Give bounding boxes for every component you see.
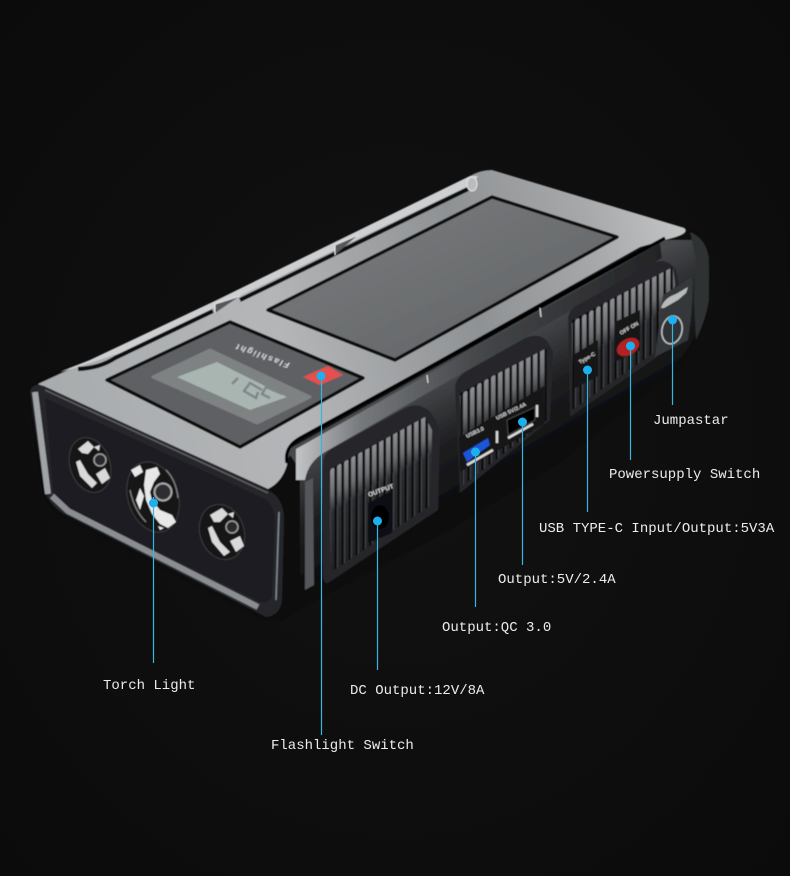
dc port plate xyxy=(368,490,393,543)
callout: qc output xyxy=(442,448,551,636)
rear groove xyxy=(78,188,470,369)
callout: torch light xyxy=(103,497,195,694)
jump starter device xyxy=(30,170,710,620)
front trim xyxy=(30,385,284,617)
off on label: OFF ON xyxy=(619,321,640,337)
callout: jumpstart: Jumpastar xyxy=(653,413,729,429)
red switch xyxy=(614,334,642,360)
panel: front face xyxy=(30,385,284,617)
dc port xyxy=(371,505,389,529)
back rim highlight xyxy=(60,176,478,372)
callout: dc output xyxy=(350,516,485,699)
callout: power supply switch: Powersupply Switch xyxy=(609,467,760,483)
blue qc port xyxy=(463,438,490,462)
flashlight button xyxy=(303,366,343,385)
usb port xyxy=(507,407,535,435)
left trim highlight xyxy=(35,392,48,494)
bottom trim highlight xyxy=(52,496,258,607)
vertical gray band xyxy=(305,478,314,590)
power switch plate xyxy=(615,310,640,362)
display bezel xyxy=(107,322,363,447)
lcd outer xyxy=(153,350,310,423)
lcd digits xyxy=(232,378,282,398)
type-c label: Type-C xyxy=(578,351,597,366)
callout: usb type-c: USB TYPE-C Input/Output:5V3A xyxy=(539,521,775,537)
panel: display area xyxy=(107,322,363,447)
output label: OUTPUT xyxy=(367,483,395,499)
qc port trim xyxy=(467,431,497,465)
side wall xyxy=(285,240,707,612)
callout: torch light: Torch Light xyxy=(103,678,195,694)
right lens xyxy=(192,499,252,565)
lcd screen xyxy=(177,362,287,410)
top silver surface xyxy=(38,170,686,489)
callout: qc output: Output:QC 3.0 xyxy=(442,620,551,636)
usb 5v label: USB 5V/2.4A xyxy=(495,402,528,422)
main groove xyxy=(287,238,665,463)
groove notches xyxy=(215,235,358,313)
strip ticks xyxy=(427,308,541,383)
panel: usb grill xyxy=(455,336,553,493)
flashlight label: Flashlight xyxy=(234,342,291,371)
callout: usb type-c xyxy=(539,366,775,537)
panel: power grill xyxy=(568,261,692,417)
usb 3 label: USB3.0 xyxy=(465,426,485,440)
jump start plate xyxy=(655,277,692,357)
top trim line xyxy=(45,390,268,493)
callout: flashlight switch xyxy=(271,372,414,754)
dark corner pillar xyxy=(272,455,300,616)
callout: dc output: DC Output:12V/8A xyxy=(350,683,485,699)
right trim line xyxy=(276,512,279,600)
usb port trim xyxy=(508,405,537,438)
callout: power supply switch xyxy=(609,342,760,483)
left lens xyxy=(62,432,118,498)
silver strip xyxy=(296,243,662,480)
device body xyxy=(30,170,710,620)
callout: jumpstart xyxy=(653,316,729,429)
front face xyxy=(45,398,275,602)
callout: usb output xyxy=(498,418,616,588)
center lens xyxy=(118,455,188,539)
callout: flashlight switch: Flashlight Switch xyxy=(271,738,414,754)
end cap xyxy=(690,232,709,340)
type-c plate xyxy=(575,340,598,388)
car icon xyxy=(661,287,688,308)
panel: rubber mat xyxy=(268,197,617,360)
start button xyxy=(659,314,685,346)
usb plate xyxy=(459,386,544,472)
groove end cap xyxy=(467,177,477,191)
panel: dc output grill xyxy=(323,405,440,583)
callout: usb output: Output:5V/2.4A xyxy=(498,572,616,588)
